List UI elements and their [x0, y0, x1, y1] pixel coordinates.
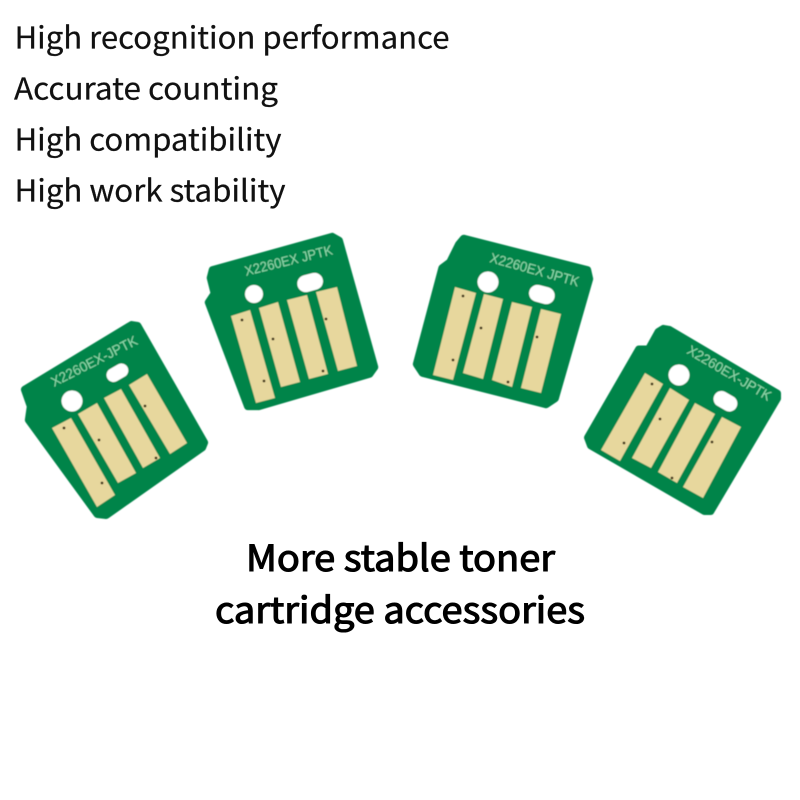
chip 3	[417, 239, 589, 404]
chip 1 test points	[63, 405, 157, 484]
chip 4 holes	[668, 364, 740, 414]
chip 2	[209, 237, 374, 406]
chip 2 marking: X2260EX JPTK	[243, 241, 335, 279]
chip 4 contact pads	[601, 373, 741, 498]
chip 1 holes	[62, 361, 131, 412]
feature: high work stability: High work stability	[14, 166, 286, 210]
chip 4 marking: X2260EX-JPTK	[684, 342, 775, 404]
tagline	[215, 530, 585, 634]
chip 2 contact pads	[231, 287, 357, 403]
tagline line 1: More stable toner	[246, 530, 556, 582]
chip 4 board	[588, 329, 777, 511]
feature: high compatibility: High compatibility	[14, 116, 282, 160]
chip 1 board	[25, 325, 204, 515]
chip 3 holes	[478, 272, 557, 306]
chip 3 contact pads	[433, 287, 561, 393]
chip 1 contact pads	[52, 374, 187, 507]
chip 2 board	[209, 237, 374, 406]
chip 4	[588, 329, 777, 511]
chip 4 test points	[623, 383, 713, 479]
chip 3 board	[417, 239, 589, 404]
feature list	[14, 14, 450, 210]
feature: high recognition performance: High recognition performance	[14, 14, 450, 58]
chip 2 test points	[241, 318, 327, 382]
chip 3 test points	[452, 295, 538, 383]
feature: accurate counting: Accurate counting	[14, 64, 278, 108]
chip 3 marking: X2260EX JPTK	[488, 249, 582, 290]
tagline line 2: cartridge accessories	[215, 582, 585, 634]
chip 1 marking: X2260EX-JPTK	[48, 332, 141, 390]
chip 2 holes	[245, 271, 325, 303]
chip 1	[25, 325, 204, 515]
